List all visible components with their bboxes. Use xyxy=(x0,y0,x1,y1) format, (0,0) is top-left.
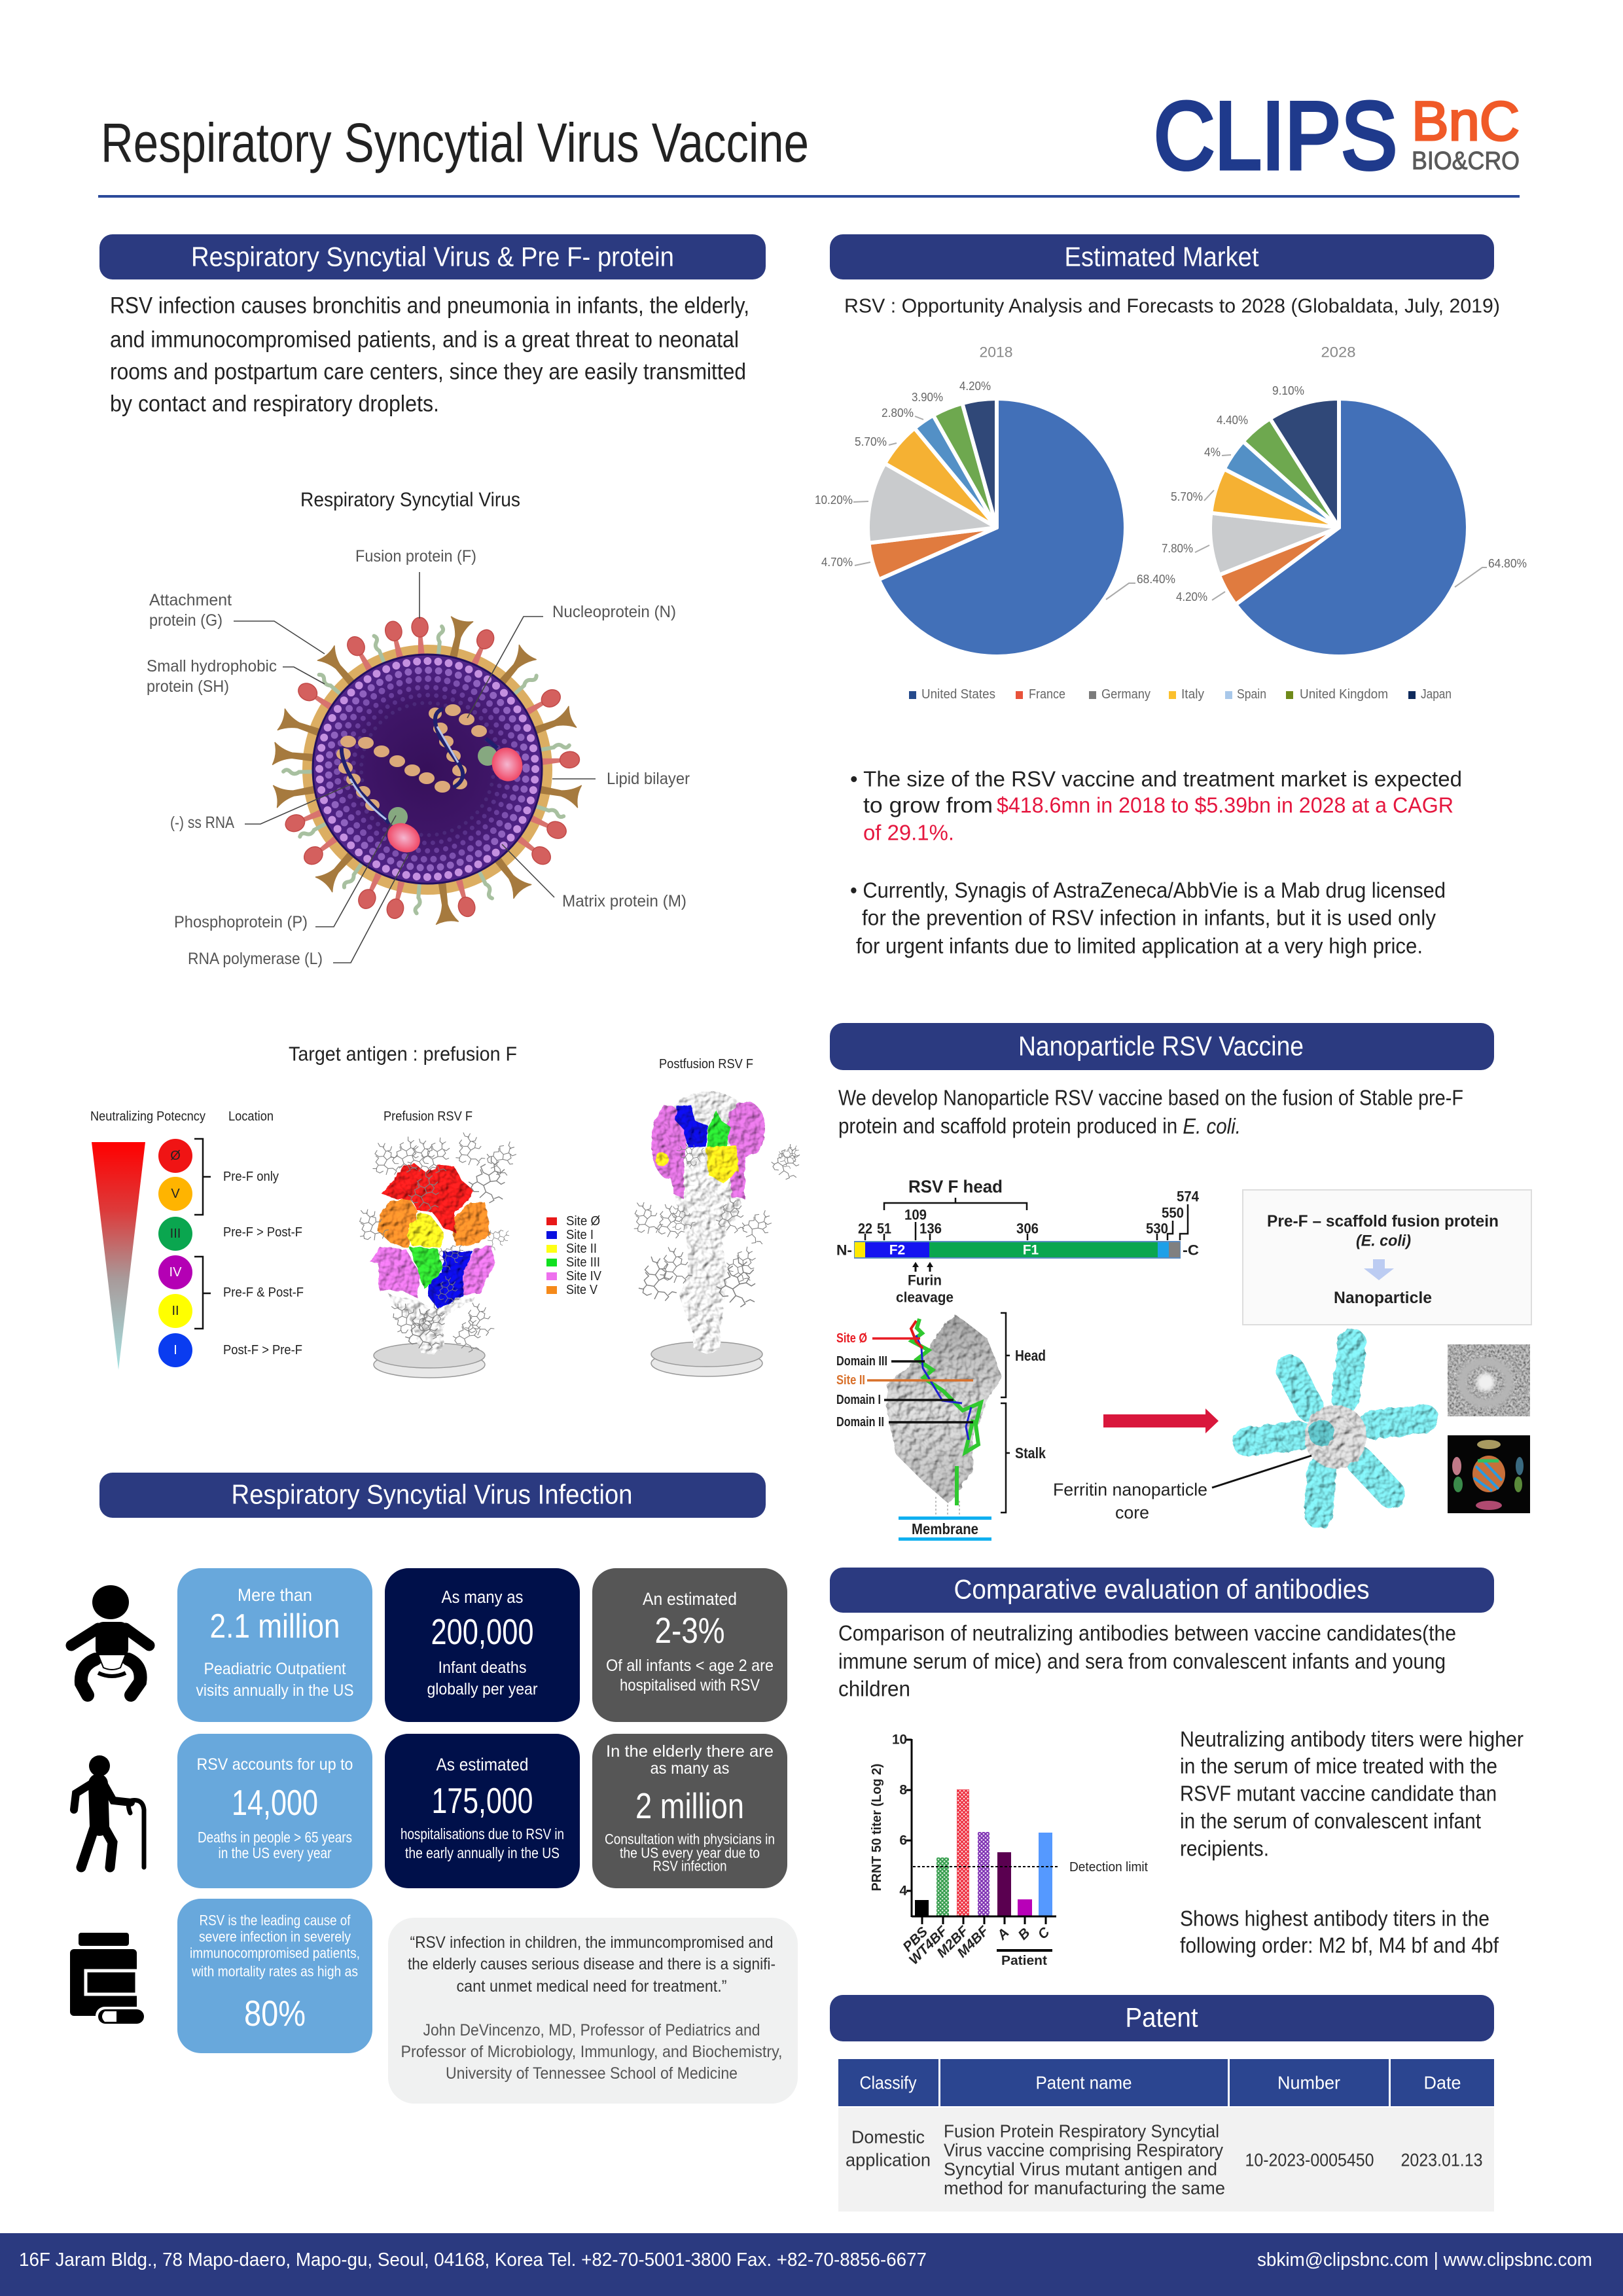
stat card: 2.1 million: visits annually in the US xyxy=(196,1681,353,1700)
potency triangle xyxy=(92,1142,145,1370)
stat card: 175,000 xyxy=(385,1734,580,1888)
virus labels: protein (G) xyxy=(149,611,223,630)
bar chart: PRNT50 titer: Detection limit xyxy=(1069,1860,1148,1874)
F protein structure xyxy=(836,1313,1046,1541)
comparison text xyxy=(838,1621,1456,1700)
heading xyxy=(830,234,1494,279)
stat card: 80%: immunocompromised patients, xyxy=(190,1945,360,1961)
patent table xyxy=(838,2059,1494,2212)
stat card: 14,000: RSV accounts for up to xyxy=(196,1755,353,1774)
comparison text: Comparison of neutralizing antibodies between vaccine candidates(the xyxy=(838,1621,1456,1645)
arrow: to nanoparticle xyxy=(1103,1408,1219,1433)
site legend xyxy=(546,1214,602,1297)
comparison text: children xyxy=(838,1677,910,1700)
virus labels xyxy=(147,547,690,968)
ferritin nanoparticle: core xyxy=(1115,1503,1149,1522)
site legend: Site II xyxy=(566,1242,597,1256)
heading xyxy=(830,1995,1494,2041)
pie chart 2028: 4.40% xyxy=(1217,414,1248,427)
structure labels: Site Ø xyxy=(836,1331,867,1346)
coloured sites and stalk xyxy=(651,1092,766,1354)
F protein domain map: F2 xyxy=(889,1242,905,1258)
panel: nanoparticle RSV vaccine xyxy=(830,1023,1531,1541)
stat card: 200,000: As many as xyxy=(441,1587,524,1607)
virus labels: Lipid bilayer xyxy=(607,770,690,788)
virus diagram xyxy=(147,547,690,968)
patent table: method for manufacturing the same xyxy=(944,2178,1225,2198)
stat card: 2.1 million: 2.1 million xyxy=(209,1607,340,1645)
stat card: 200,000: globally per year xyxy=(427,1680,538,1698)
heading: Estimated Market xyxy=(1064,241,1259,272)
pie chart 2018: 4.70% xyxy=(821,556,853,569)
F protein domain map: F1 xyxy=(1023,1242,1039,1258)
F protein domain map: 574 xyxy=(1177,1189,1200,1204)
membrane discs xyxy=(651,1342,762,1376)
ferritin nanoparticle: Ferritin nanoparticle xyxy=(1053,1480,1207,1499)
quote box: Professor of Microbiology, Immunlogy, and Biochemistry, xyxy=(401,2043,783,2061)
site legend: Site IV xyxy=(566,1269,602,1283)
intro text: and immunocompromised patients, and is a great threat to neonatal xyxy=(110,327,739,352)
F protein domain map: -C xyxy=(1183,1242,1199,1258)
ferritin nanoparticle xyxy=(1053,1343,1424,1522)
axis tick labels: WT4BF xyxy=(906,1923,951,1967)
site circles: II xyxy=(171,1304,179,1318)
pie legend: Spain xyxy=(1237,687,1266,702)
market source line: RSV : Opportunity Analysis and Forecasts to 2028 (Globaldata, July, 2019) xyxy=(844,295,1500,317)
antibody findings text: RSVF mutant vaccine candidate than xyxy=(1180,1782,1497,1805)
pie chart 2028: 64.80% xyxy=(1488,557,1527,570)
market bullet text: $418.6mn in 2018 to $5.39bn in 2028 at a CAGR xyxy=(997,793,1454,817)
logo: BnC xyxy=(1412,90,1520,152)
RNA strands xyxy=(342,709,497,823)
market bullet text xyxy=(850,767,1462,958)
patent table: 10-2023-0005450 xyxy=(1245,2149,1374,2170)
stat card: 200,000 xyxy=(385,1568,580,1722)
structure labels: Domain III xyxy=(836,1354,887,1369)
footer xyxy=(0,2233,1623,2296)
spikes xyxy=(273,617,581,924)
axes xyxy=(906,1739,1056,1924)
panel: comparative evaluation of antibodies xyxy=(830,1568,1524,1968)
antibody findings text: Shows highest antibody titers in the xyxy=(1180,1906,1489,1931)
location labels: Pre-F & Post-F xyxy=(223,1285,304,1300)
pie chart 2018: 2.80% xyxy=(882,406,914,420)
patent table: Date xyxy=(1424,2072,1461,2093)
postfusion RSV F structure xyxy=(624,1057,804,1376)
market bullet text: of 29.1%. xyxy=(863,821,954,844)
stat card: 2 million xyxy=(592,1734,787,1888)
prefusion RSV F structure: Prefusion RSV F xyxy=(383,1109,473,1124)
stat card: 2.1 million: Peadiatric Outpatient xyxy=(204,1660,346,1678)
stat card: 175,000: hospitalisations due to RSV in xyxy=(401,1825,564,1842)
antibody findings text xyxy=(1180,1727,1524,1957)
axis tick labels: M2BF xyxy=(934,1923,972,1961)
site circles: IV xyxy=(169,1265,182,1280)
market bullet text: • The size of the RSV vaccine and treatment market is expected xyxy=(850,767,1462,791)
stat card: 80% xyxy=(177,1899,372,2053)
antibody findings text: recipients. xyxy=(1180,1837,1269,1860)
virus labels: protein (SH) xyxy=(147,677,229,696)
stat card: 80%: with mortality rates as high as xyxy=(191,1964,358,1979)
axis tick labels: 8 xyxy=(899,1783,907,1797)
antibody findings text: in the serum of mice treated with the xyxy=(1180,1754,1497,1778)
F protein domain map: RSV F head xyxy=(908,1177,1003,1196)
pie chart 2028: 2028 xyxy=(1321,344,1356,360)
ribbon xyxy=(912,1319,981,1505)
logo: BIO&CRO xyxy=(1412,147,1520,175)
stat card: 2-3% xyxy=(592,1568,787,1722)
bars xyxy=(915,1789,1052,1916)
fusion protein box: Pre-F – scaffold fusion protein xyxy=(1267,1212,1499,1230)
pie chart 2018: 3.90% xyxy=(912,391,943,404)
footer: sbkim@clipsbnc.com | www.clipsbnc.com xyxy=(1257,2250,1592,2270)
pie legend: Japan xyxy=(1421,687,1452,702)
pie chart 2018: 2018 xyxy=(979,344,1013,360)
pie chart 2018 xyxy=(815,344,1175,656)
stat card: 14,000 xyxy=(177,1734,372,1888)
membrane discs xyxy=(374,1343,485,1378)
location labels: Pre-F only xyxy=(223,1170,279,1184)
icon: medicine bottle xyxy=(70,1933,147,2026)
stat card: 80%: severe infection in severely xyxy=(199,1928,351,1945)
location labels xyxy=(223,1170,304,1357)
pie chart 2018: 5.70% xyxy=(855,435,887,448)
stat card: 175,000: As estimated xyxy=(436,1755,529,1774)
stat card: 200,000: Infant deaths xyxy=(438,1659,526,1677)
axis tick labels: Patient xyxy=(1001,1954,1047,1968)
pie chart 2018: 10.20% xyxy=(815,493,853,507)
stat card: 2-3%: 2-3% xyxy=(654,1610,725,1651)
fusion protein box: (E. coli) xyxy=(1356,1232,1411,1250)
site legend: Site III xyxy=(566,1255,600,1270)
location labels: Post-F > Pre-F xyxy=(223,1343,302,1357)
nanoparticle text: We develop Nanoparticle RSV vaccine based on the fusion of Stable pre-F xyxy=(838,1085,1463,1110)
stat card: 2 million: Consultation with physicians in xyxy=(605,1831,775,1847)
quote box: University of Tennessee School of Medicine xyxy=(446,2064,738,2083)
neutralizing potency scale: Neutralizing Potecncy xyxy=(90,1109,205,1124)
panel: estimated market xyxy=(815,234,1527,958)
stat card: 2-3%: Of all infants < age 2 are xyxy=(606,1657,774,1675)
pie chart 2028: 5.70% xyxy=(1171,490,1203,503)
virus diagram title: Respiratory Syncytial Virus xyxy=(300,488,520,511)
nanoparticle text: protein and scaffold protein produced in E. coli. xyxy=(838,1114,1241,1138)
bar chart: PRNT50 titer xyxy=(870,1732,1148,1968)
structure labels: Stalk xyxy=(1015,1444,1046,1462)
glycans xyxy=(624,1139,804,1308)
capsid xyxy=(313,655,542,884)
virus labels: RNA polymerase (L) xyxy=(188,950,323,968)
stat card: 2 million: RSV infection xyxy=(653,1857,726,1874)
F protein domain map: N- xyxy=(836,1242,852,1258)
axis tick labels: A xyxy=(994,1926,1012,1943)
fusion protein box: Nanoparticle xyxy=(1334,1289,1432,1307)
intro text xyxy=(110,293,749,416)
axis tick labels: M4BF xyxy=(954,1923,992,1961)
site circles xyxy=(158,1139,192,1367)
pie legend: United Kingdom xyxy=(1300,687,1388,702)
prefusion RSV F structure xyxy=(349,1109,522,1378)
structure labels: Site II xyxy=(836,1373,865,1388)
F protein domain map: cleavage xyxy=(896,1289,954,1305)
heading xyxy=(99,234,766,279)
F protein domain map: 136 xyxy=(919,1220,942,1237)
patent table: Fusion Protein Respiratory Syncytial xyxy=(944,2121,1219,2142)
F protein domain map: 51 xyxy=(877,1220,891,1237)
logo: CLIPS xyxy=(1154,82,1397,188)
quote box: “RSV infection in children, the immuncompromised and xyxy=(410,1933,774,1952)
heading: Respiratory Syncytial Virus Infection xyxy=(232,1479,632,1509)
structure labels: Domain I xyxy=(836,1393,881,1407)
panel: patent xyxy=(830,1995,1494,2212)
site circles: V xyxy=(171,1187,180,1201)
pie chart 2028: 4.20% xyxy=(1176,590,1207,603)
icon: elderly person with cane xyxy=(74,1755,144,1867)
site circles: Ø xyxy=(170,1149,181,1163)
title: Respiratory Syncytial Virus Vaccine xyxy=(101,112,809,173)
structure labels: Head xyxy=(1015,1347,1046,1364)
quote box xyxy=(388,1918,798,2104)
F protein domain map: 306 xyxy=(1016,1220,1039,1237)
intro text: rooms and postpartum care centers, since they are easily transmitted xyxy=(110,359,746,385)
heading xyxy=(99,1473,766,1518)
structure labels: Membrane xyxy=(912,1520,978,1537)
stat card: 2 million: as many as xyxy=(651,1759,729,1778)
axis tick labels: C xyxy=(1035,1924,1053,1942)
stat card: 2-3%: hospitalised with RSV xyxy=(620,1676,760,1695)
class average image xyxy=(1448,1435,1530,1513)
quote box: the elderly causes serious disease and there is a signifi- xyxy=(408,1955,776,1973)
virus labels: Fusion protein (F) xyxy=(355,547,476,565)
glycans xyxy=(349,1129,522,1354)
pie legend: France xyxy=(1029,687,1065,702)
site circles: I xyxy=(173,1343,177,1357)
virus labels: Attachment xyxy=(149,591,232,609)
antibody findings text: in the serum of convalescent infant xyxy=(1180,1809,1481,1833)
axis tick labels: PBS xyxy=(900,1924,931,1955)
F protein domain map: 550 xyxy=(1162,1204,1184,1221)
target antigen title: Target antigen : prefusion F xyxy=(289,1042,517,1066)
nanoparticle text xyxy=(838,1085,1463,1138)
patent table: application xyxy=(846,2149,931,2170)
axis tick labels xyxy=(892,1732,1053,1968)
axis tick labels: 6 xyxy=(899,1833,907,1848)
virus labels: Phosphoprotein (P) xyxy=(174,913,308,931)
lipid bilayer xyxy=(302,645,552,895)
nucleoprotein beads xyxy=(336,704,487,811)
pie legend: Germany xyxy=(1101,687,1150,702)
virus labels: Small hydrophobic xyxy=(147,657,277,675)
pie chart 2028: 9.10% xyxy=(1272,384,1304,397)
stat card: 14,000: 14,000 xyxy=(232,1782,318,1823)
site circles: III xyxy=(170,1227,181,1241)
pie legend: Italy xyxy=(1181,687,1204,702)
patent table: Patent name xyxy=(1035,2072,1132,2093)
pie legend xyxy=(909,687,1452,702)
patent table: 2023.01.13 xyxy=(1400,2149,1483,2170)
intro text: RSV infection causes bronchitis and pneumonia in infants, the elderly, xyxy=(110,293,749,318)
virus labels: (-) ss RNA xyxy=(170,814,234,832)
heading: Patent xyxy=(1126,2001,1198,2033)
antibody findings text: following order: M2 bf, M4 bf and 4bf xyxy=(1180,1933,1499,1957)
stat card: 175,000: 175,000 xyxy=(432,1780,533,1821)
stat card: 14,000: in the US every year xyxy=(219,1844,332,1861)
stat card: 2 million: In the elderly there are xyxy=(606,1742,774,1761)
fusion protein box xyxy=(1243,1190,1531,1325)
market bullet text: to grow from xyxy=(863,793,993,817)
quote box: John DeVincenzo, MD, Professor of Pediatrics and xyxy=(423,2021,760,2039)
stat card: 2.1 million: Mere than xyxy=(238,1585,312,1605)
coloured antigenic sites and stalk xyxy=(370,1164,495,1355)
patent table: Syncytial Virus mutant antigen and xyxy=(944,2159,1217,2179)
leader lines xyxy=(234,572,596,963)
stat card: 2 million: the US every year due to xyxy=(620,1844,760,1861)
axis tick labels: 10 xyxy=(892,1732,907,1748)
location labels: Pre-F > Post-F xyxy=(223,1225,302,1240)
site legend: Site I xyxy=(566,1228,594,1242)
structure labels: Domain II xyxy=(836,1415,884,1429)
stat card: 80%: 80% xyxy=(244,1993,306,2034)
axis tick labels: 4 xyxy=(899,1884,907,1898)
y axis label: PRNT 50 titer (Log 2) xyxy=(870,1763,884,1892)
patent table: Number xyxy=(1277,2072,1340,2093)
comparison text: immune serum of mice) and sera from convalescent infants and young xyxy=(838,1649,1446,1673)
electron micrograph xyxy=(1448,1344,1530,1416)
stat card: 175,000: the early annually in the US xyxy=(405,1844,560,1861)
panel: RSV infection xyxy=(70,1473,798,2104)
site legend: Site Ø xyxy=(566,1214,600,1229)
neutralizing potency scale: Location xyxy=(228,1109,274,1124)
icon: baby xyxy=(71,1585,149,1695)
virus labels: Matrix protein (M) xyxy=(562,892,687,910)
F protein domain map xyxy=(836,1177,1200,1305)
stat card: 2 million: 2 million xyxy=(635,1785,744,1826)
F protein domain map: 109 xyxy=(904,1207,927,1223)
intro text: by contact and respiratory droplets. xyxy=(110,391,439,416)
pie chart 2018: 4.20% xyxy=(959,380,991,393)
pie chart 2028: 4% xyxy=(1204,446,1221,459)
heading xyxy=(830,1023,1494,1070)
heading: Nanoparticle RSV Vaccine xyxy=(1018,1030,1304,1062)
axis tick labels: B xyxy=(1016,1926,1033,1943)
antibody findings text: Neutralizing antibody titers were higher xyxy=(1180,1727,1524,1751)
patent table: Classify xyxy=(860,2072,916,2093)
detection limit xyxy=(913,1866,1060,1867)
virus labels: Nucleoprotein (N) xyxy=(552,603,676,621)
stat card: 2.1 million xyxy=(177,1568,372,1722)
postfusion RSV F structure: Postfusion RSV F xyxy=(659,1057,753,1071)
heading: Comparative evaluation of antibodies xyxy=(954,1573,1369,1605)
market bullet text: • Currently, Synagis of AstraZeneca/AbbVie is a Mab drug licensed xyxy=(850,878,1446,902)
quote box: cant unmet medical need for treatment.” xyxy=(457,1977,726,1996)
site legend: Site V xyxy=(566,1283,598,1297)
polymerase complexes xyxy=(382,744,527,858)
market bullet text: for urgent infants due to limited application at a very high price. xyxy=(856,933,1423,958)
brackets xyxy=(194,1139,211,1329)
heading: Respiratory Syncytial Virus & Pre F- protein xyxy=(191,241,674,272)
footer: 16F Jaram Bldg., 78 Mapo-daero, Mapo-gu, Seoul, 04168, Korea Tel. +82-70-5001-3800 Fax. +82-70-8856-6677 xyxy=(19,2250,927,2270)
F protein domain map: Furin xyxy=(908,1272,942,1288)
pie chart 2028 xyxy=(1162,344,1527,656)
stat card: 14,000: Deaths in people > 65 years xyxy=(198,1829,352,1846)
F protein domain map: 530 xyxy=(1146,1220,1168,1237)
stat card: 2-3%: An estimated xyxy=(643,1589,737,1609)
patent table: Virus vaccine comprising Respiratory xyxy=(944,2140,1223,2160)
structure labels xyxy=(836,1331,1046,1537)
pie chart 2018: 68.40% xyxy=(1137,573,1175,586)
F protein domain map: 22 xyxy=(858,1220,872,1237)
stat card: 200,000: 200,000 xyxy=(431,1611,534,1652)
heading xyxy=(830,1568,1494,1613)
market bullet text: for the prevention of RSV infection in infants, but it is used only xyxy=(862,906,1436,929)
neutralizing potency scale xyxy=(90,1109,304,1370)
panel: RSV and Pre F protein xyxy=(90,234,804,1378)
patent table: Domestic xyxy=(851,2127,925,2147)
stat card: 80%: RSV is the leading cause of xyxy=(199,1912,351,1928)
pie legend: United States xyxy=(921,687,995,702)
pie chart 2028: 7.80% xyxy=(1162,542,1193,555)
